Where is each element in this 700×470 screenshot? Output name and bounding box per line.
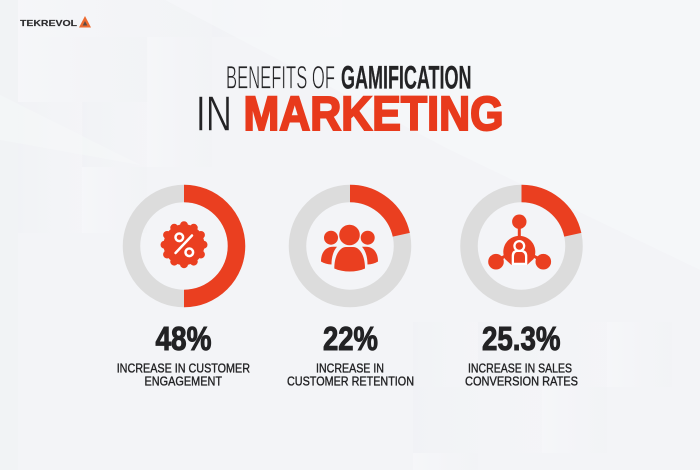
label: CONVERSION RATES — [465, 375, 578, 389]
icon: group of people — [321, 225, 378, 272]
panel: sales conversion — [465, 194, 578, 389]
heading line 1: GAMIFICATION — [341, 59, 472, 95]
logo: Tekrevol: TEKREVOL — [20, 18, 78, 28]
heading line 2: IN — [196, 88, 232, 142]
donut chart: 22% — [298, 194, 402, 298]
donut chart: 25.3% — [469, 194, 574, 298]
donut chart: 48% — [132, 194, 236, 298]
icon: percent badge — [160, 221, 208, 268]
heading line 1: BENEFITS OF — [226, 59, 335, 95]
label: ENGAGEMENT — [144, 375, 222, 389]
label — [117, 362, 250, 389]
heading line 2: MARKETING — [244, 88, 504, 141]
statistic: 25.3% — [482, 320, 560, 357]
icon: connected customer network — [488, 214, 551, 270]
label — [465, 362, 578, 389]
label: INCREASE IN — [316, 362, 384, 376]
label: INCREASE IN CUSTOMER — [117, 362, 250, 376]
label — [287, 362, 414, 389]
statistic: 22% — [323, 320, 378, 357]
title — [196, 59, 503, 142]
statistic: 48% — [156, 320, 212, 357]
panel: customer engagement — [117, 194, 250, 389]
panel: customer retention — [287, 194, 414, 389]
label: CUSTOMER RETENTION — [287, 375, 414, 389]
logo: Tekrevol — [20, 16, 91, 28]
label: INCREASE IN SALES — [468, 362, 572, 376]
